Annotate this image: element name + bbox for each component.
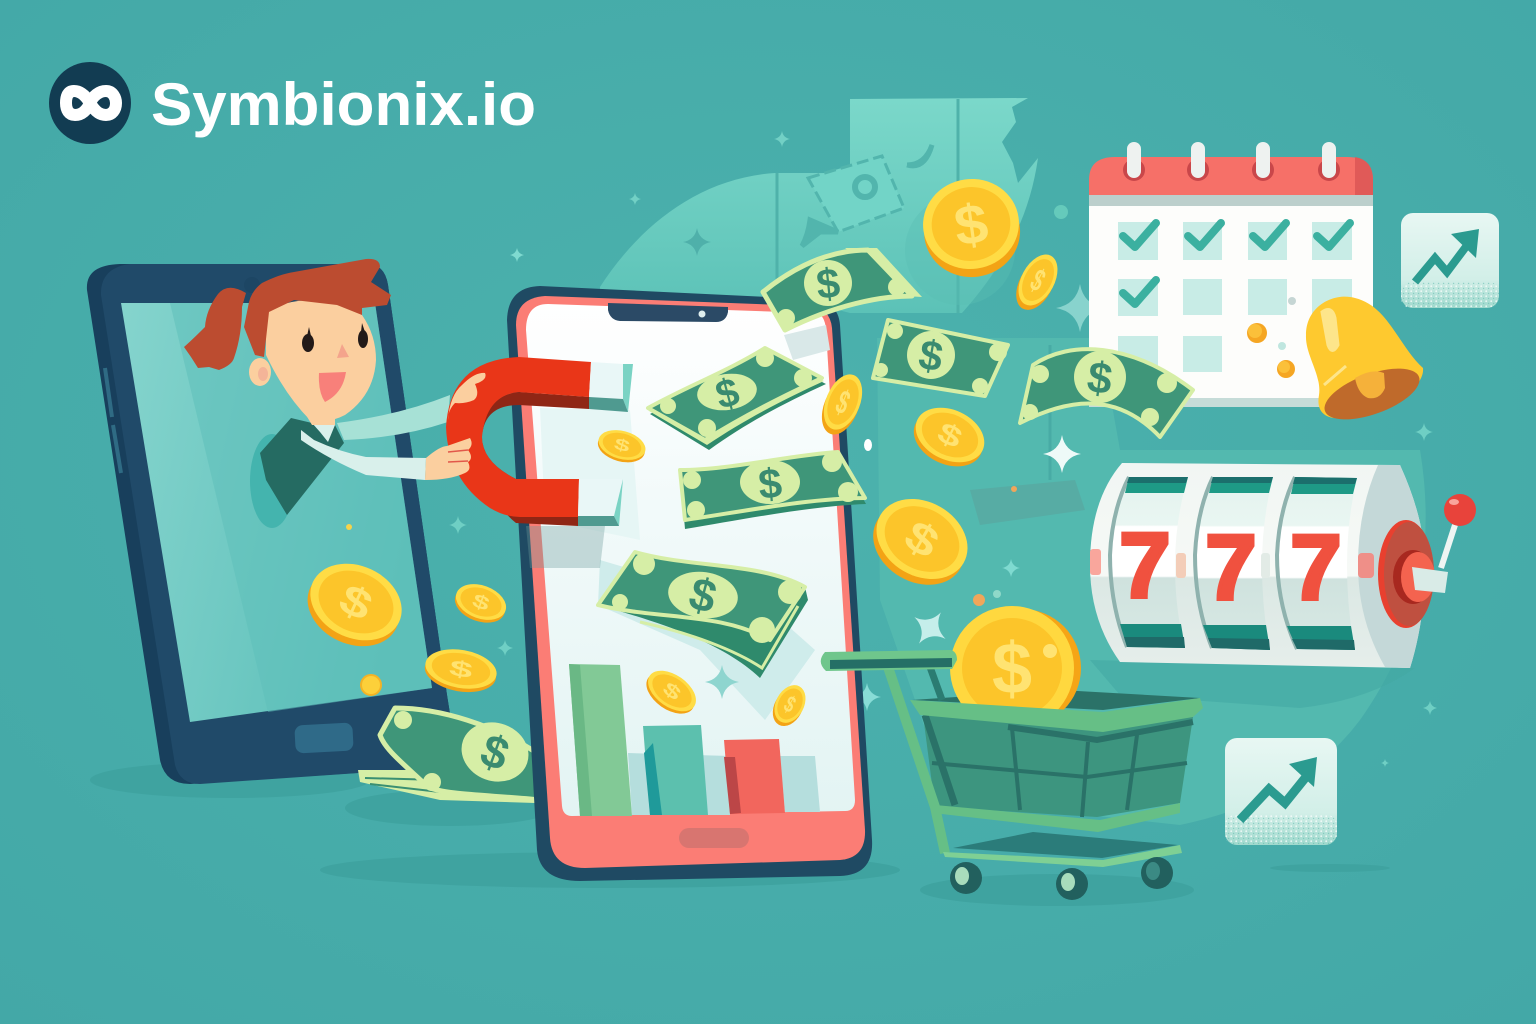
slot side tabs — [1090, 549, 1374, 578]
bar: teal — [643, 725, 708, 815]
small dot — [346, 524, 352, 530]
bell — [1306, 297, 1426, 430]
slot lever — [1412, 494, 1476, 593]
slot body — [1090, 463, 1425, 668]
cart wheels — [950, 857, 1173, 900]
tablet side buttons — [105, 368, 121, 473]
calendar dots — [1247, 297, 1296, 378]
reel 3: 7 — [1290, 517, 1342, 619]
coin — [767, 680, 812, 731]
coin: $ — [831, 382, 855, 422]
ear — [249, 358, 271, 386]
cart handle — [821, 650, 957, 853]
logo mark — [49, 62, 131, 144]
bell clapper — [1355, 371, 1385, 398]
calendar page — [1089, 205, 1373, 398]
cart tray rim — [943, 845, 1182, 867]
cart basket interior — [912, 690, 1200, 710]
torso — [260, 418, 344, 515]
coin: $ — [1025, 262, 1051, 299]
tablet screen — [121, 303, 432, 722]
coin — [905, 397, 993, 477]
lower arm — [301, 430, 426, 480]
coin: $ — [659, 678, 685, 705]
coin — [639, 662, 703, 722]
stack of bills beside tablet: $ — [474, 723, 516, 781]
sparkle on phone — [705, 665, 739, 699]
top pole — [589, 362, 633, 412]
coin — [422, 644, 500, 697]
bottom pole — [578, 479, 623, 526]
reel 2: 7 — [1205, 517, 1257, 619]
hands gripping magnet — [425, 373, 486, 480]
left tablet — [87, 264, 455, 784]
nose — [337, 344, 349, 358]
calendar — [1089, 142, 1373, 407]
lower hand — [425, 438, 472, 480]
calendar check marks — [1123, 223, 1350, 304]
bar: green — [569, 664, 632, 816]
bell mouth — [1318, 358, 1426, 430]
bill stack: $ — [684, 567, 722, 623]
bill stack — [680, 452, 866, 529]
coin — [450, 578, 511, 629]
tablet home button — [294, 723, 354, 753]
bill over calendar — [1020, 349, 1193, 437]
bill — [873, 320, 1008, 396]
screen panels — [598, 560, 815, 720]
bill stack: $ — [711, 370, 744, 418]
coin: $ — [896, 510, 947, 568]
phone home button — [679, 828, 749, 848]
decorative sparkles — [449, 131, 1437, 767]
reel 1: 7 — [1119, 515, 1171, 617]
coin: $ — [469, 590, 492, 615]
coin: $ — [951, 192, 992, 258]
reel 1 — [1110, 477, 1188, 648]
calendar rings — [1123, 142, 1340, 181]
slot machine — [1090, 463, 1476, 668]
reel 2 — [1195, 477, 1273, 650]
floating bills and coins — [595, 173, 1065, 731]
cart rear post — [930, 667, 942, 700]
bill stack: $ — [756, 459, 784, 508]
phone notch — [608, 303, 728, 322]
back pale bars — [628, 753, 820, 815]
face — [266, 300, 376, 421]
bell highlights — [1322, 310, 1346, 385]
woman emerging from tablet — [184, 259, 450, 528]
coin: $ — [933, 415, 968, 455]
cart rim — [910, 698, 1203, 732]
coin — [917, 173, 1026, 283]
horseshoe magnet — [446, 357, 633, 526]
screen hole — [250, 434, 294, 528]
cart bottom rim — [933, 803, 1180, 832]
coins below the tablet — [295, 524, 511, 697]
slot wheel — [1378, 520, 1435, 628]
calendar cells — [1118, 222, 1352, 372]
cart lower tray — [953, 832, 1178, 858]
cart basket body — [923, 715, 1193, 817]
magnet body — [446, 357, 591, 517]
bell body — [1306, 297, 1423, 418]
coin — [814, 369, 870, 440]
hair tie — [244, 277, 260, 293]
calendar header — [1089, 157, 1373, 195]
coin in cart — [950, 606, 1081, 730]
bar: red — [724, 739, 785, 814]
coin: $ — [332, 575, 379, 630]
upper arm — [337, 395, 450, 440]
magnet shade — [482, 392, 590, 526]
reel 3 — [1277, 477, 1357, 650]
bill on phone corner: $ — [814, 259, 842, 308]
coin — [295, 549, 414, 661]
logo — [49, 62, 536, 144]
slot end cap — [1358, 465, 1425, 668]
mouth — [319, 372, 346, 402]
trend tile bottom — [1225, 738, 1337, 845]
neck — [300, 405, 335, 425]
logo wordmark: Symbionix.io — [151, 71, 536, 138]
background map blob: top — [600, 98, 1038, 313]
coin — [595, 425, 649, 467]
coin — [1008, 248, 1065, 316]
phone coral shell — [516, 296, 865, 868]
ponytail — [184, 288, 246, 370]
upper hand — [448, 373, 486, 420]
phone frame — [507, 286, 872, 881]
background map blob: right — [877, 338, 1426, 825]
bill stack — [648, 348, 826, 450]
tablet frame — [87, 264, 455, 784]
shopping cart — [821, 606, 1203, 900]
hair — [244, 259, 391, 357]
phone screen — [526, 304, 855, 816]
bill stack — [598, 552, 808, 678]
eyes — [302, 323, 368, 352]
trend tile top — [1401, 213, 1499, 308]
coin: $ — [612, 434, 632, 456]
bill on phone corner — [763, 248, 922, 330]
central phone — [507, 286, 872, 881]
collar — [312, 423, 335, 442]
bill: $ — [915, 330, 946, 381]
coin: $ — [780, 692, 799, 718]
bill over calendar: $ — [1084, 353, 1115, 404]
coin in cart: $ — [992, 629, 1032, 709]
ground shadows — [90, 762, 1390, 906]
small coin — [361, 675, 381, 695]
coin — [859, 483, 982, 601]
stack of bills beside tablet — [358, 708, 540, 803]
cart basket grid — [925, 715, 1193, 817]
coin: $ — [447, 656, 475, 684]
